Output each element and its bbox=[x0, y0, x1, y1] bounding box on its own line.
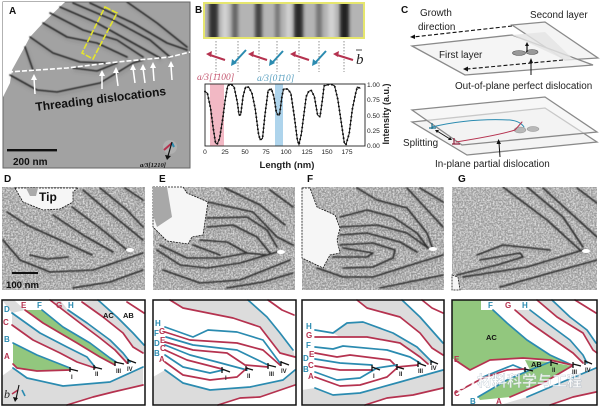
compass: a/3[1210] bbox=[140, 162, 167, 169]
caption: threading dislocations: Threading dislocations bbox=[35, 84, 167, 114]
line letters: H bbox=[155, 319, 161, 328]
scale bar: 200 nm bbox=[13, 157, 48, 168]
intensity line chart: 150 bbox=[321, 149, 333, 156]
stacking labels and numerals: III bbox=[572, 370, 577, 376]
intensity line chart: 0.50 bbox=[367, 113, 380, 120]
stacking labels and numerals: II bbox=[552, 368, 556, 374]
schematic F bbox=[302, 300, 444, 405]
vector compass: b bbox=[4, 387, 10, 401]
line letters: A bbox=[308, 372, 314, 381]
white arrows bbox=[31, 61, 174, 94]
line letters: G bbox=[505, 301, 511, 310]
numerals: II bbox=[247, 374, 251, 380]
stacking labels and numerals: IV bbox=[127, 367, 133, 373]
line letters: B bbox=[4, 335, 10, 344]
dislocations D bbox=[3, 188, 143, 288]
line letters: C bbox=[308, 361, 314, 370]
panel C lower: partial dislocation diagram: Splitting bbox=[403, 138, 438, 149]
line letters: B bbox=[154, 349, 160, 358]
dislocation knot bbox=[512, 50, 538, 56]
line letters: H bbox=[306, 322, 312, 331]
panel D: TEM image bbox=[2, 187, 145, 291]
panel C upper: perfect dislocation diagram: Second layer bbox=[530, 10, 588, 21]
line letters: B bbox=[303, 365, 309, 374]
dislocation lines bbox=[10, 2, 187, 92]
line letters: D bbox=[303, 354, 309, 363]
intensity line chart: 0.00 bbox=[367, 143, 380, 150]
panel A: TEM image with threading dislocations bbox=[3, 2, 190, 169]
scale bar bbox=[6, 272, 39, 291]
dotted guide lines bbox=[216, 41, 344, 72]
line letters: F bbox=[37, 301, 42, 310]
lines bbox=[13, 364, 70, 371]
green stacking regions bbox=[452, 300, 572, 370]
intensity line chart: Intensity (a.u.) bbox=[381, 83, 391, 145]
intensity line chart: 100 bbox=[280, 149, 292, 156]
stacking labels and numerals: III bbox=[116, 369, 121, 375]
intensity line chart: 50 bbox=[241, 149, 249, 156]
numerals: III bbox=[269, 372, 274, 378]
white dashed boundary bbox=[8, 52, 190, 72]
stacking labels and numerals bbox=[486, 333, 591, 376]
stacking labels and numerals: I bbox=[71, 375, 73, 381]
line letters bbox=[303, 322, 315, 381]
panel C upper: perfect dislocation diagram bbox=[410, 8, 598, 92]
intensity line chart: 175 bbox=[341, 149, 353, 156]
intensity line chart: 0 bbox=[203, 149, 207, 156]
line letters: A bbox=[159, 355, 165, 364]
intensity line chart: 0.25 bbox=[367, 128, 380, 135]
panel C upper: perfect dislocation diagram: Out-of-plane perfect dislocation bbox=[455, 81, 592, 92]
gray bands bbox=[2, 300, 144, 405]
line letters: H bbox=[522, 301, 528, 310]
numerals: III bbox=[418, 369, 423, 375]
line letters: D bbox=[4, 305, 10, 314]
numerals: I bbox=[225, 376, 227, 382]
panel C upper: perfect dislocation diagram: First layer bbox=[439, 50, 483, 61]
intensity line chart: Length (nm) bbox=[260, 160, 314, 171]
numerals bbox=[225, 369, 287, 382]
yellow dashed box bbox=[82, 7, 117, 59]
heading G: G bbox=[458, 174, 466, 185]
heading C: C bbox=[401, 5, 408, 16]
heading F: F bbox=[307, 174, 313, 185]
stacking labels and numerals bbox=[71, 311, 134, 381]
panel B: zoomed image strip bbox=[204, 0, 364, 41]
numerals: I bbox=[373, 374, 375, 380]
heading B: B bbox=[195, 5, 202, 16]
line letters: F bbox=[306, 341, 311, 350]
schematic G bbox=[452, 300, 597, 406]
stacking labels and numerals: AB bbox=[123, 311, 134, 320]
label: red direction: a/3[1̄100] bbox=[197, 73, 235, 83]
line letters: D bbox=[154, 339, 160, 348]
line letters bbox=[3, 301, 74, 361]
heading A: A bbox=[9, 6, 16, 17]
scale bar bbox=[7, 149, 57, 168]
scale bar: 100 nm bbox=[6, 280, 39, 291]
line letters: F bbox=[154, 329, 159, 338]
intensity line chart: 0.75 bbox=[367, 97, 380, 104]
numerals: IV bbox=[281, 369, 287, 375]
intensity line chart bbox=[203, 82, 391, 171]
white tip area bbox=[3, 2, 65, 97]
vector compass bbox=[4, 385, 25, 402]
stacking labels and numerals: AB bbox=[531, 360, 542, 369]
line letters: A bbox=[4, 352, 10, 361]
panel E: TEM image bbox=[153, 187, 295, 290]
panel D: TEM image: Tip bbox=[39, 190, 57, 204]
panel C lower: partial dislocation diagram: In-plane partial dislocation bbox=[435, 159, 550, 170]
stacking labels and numerals: IV bbox=[585, 368, 591, 374]
growth direction arrows bbox=[413, 26, 563, 69]
panel C lower: partial dislocation diagram bbox=[403, 97, 597, 170]
intensity line chart: 125 bbox=[301, 149, 313, 156]
green regions bbox=[13, 343, 70, 371]
line letters: A bbox=[496, 397, 502, 406]
panel G: TEM image bbox=[452, 187, 597, 290]
line letters: B bbox=[470, 397, 476, 406]
line letters: C bbox=[160, 344, 166, 353]
watermark: 材料科学与工程 bbox=[477, 372, 582, 390]
burgers vector arrows: b bbox=[356, 52, 364, 68]
line letters bbox=[154, 319, 166, 364]
panel C upper: perfect dislocation diagram: direction bbox=[418, 22, 455, 33]
panel F: TEM image bbox=[302, 187, 444, 290]
dislocation marks bbox=[70, 359, 136, 372]
label: blue direction: a/3[01̄10] bbox=[257, 74, 295, 84]
stacking labels and numerals: AC bbox=[486, 333, 497, 342]
line letters: G bbox=[306, 331, 312, 340]
numerals: II bbox=[399, 372, 403, 378]
line letters: G bbox=[159, 327, 165, 336]
stacking labels and numerals: AC bbox=[103, 311, 114, 320]
line letters bbox=[454, 301, 528, 406]
intensity line chart: 75 bbox=[262, 149, 270, 156]
line letters: H bbox=[68, 301, 74, 310]
line letters: E bbox=[160, 336, 166, 345]
line letters: E bbox=[454, 355, 460, 364]
burgers vector arrows bbox=[206, 50, 364, 68]
intensity line chart: 25 bbox=[221, 149, 229, 156]
heading D: D bbox=[4, 174, 11, 185]
panel C upper: perfect dislocation diagram: Growth bbox=[420, 8, 452, 19]
line letters: F bbox=[488, 301, 493, 310]
schematic E bbox=[153, 300, 296, 405]
line letters: G bbox=[56, 301, 62, 310]
stacking labels and numerals: II bbox=[95, 372, 99, 378]
line letters: C bbox=[454, 389, 460, 398]
line letters: C bbox=[3, 318, 9, 327]
numerals: IV bbox=[431, 366, 437, 372]
intensity line chart: 1.00 bbox=[367, 82, 380, 89]
heading E: E bbox=[159, 174, 166, 185]
line letters: E bbox=[309, 350, 315, 359]
compass bbox=[140, 140, 177, 169]
schematic D bbox=[2, 300, 145, 405]
numerals bbox=[373, 366, 437, 380]
line letters: E bbox=[21, 301, 27, 310]
tip bbox=[15, 188, 78, 210]
